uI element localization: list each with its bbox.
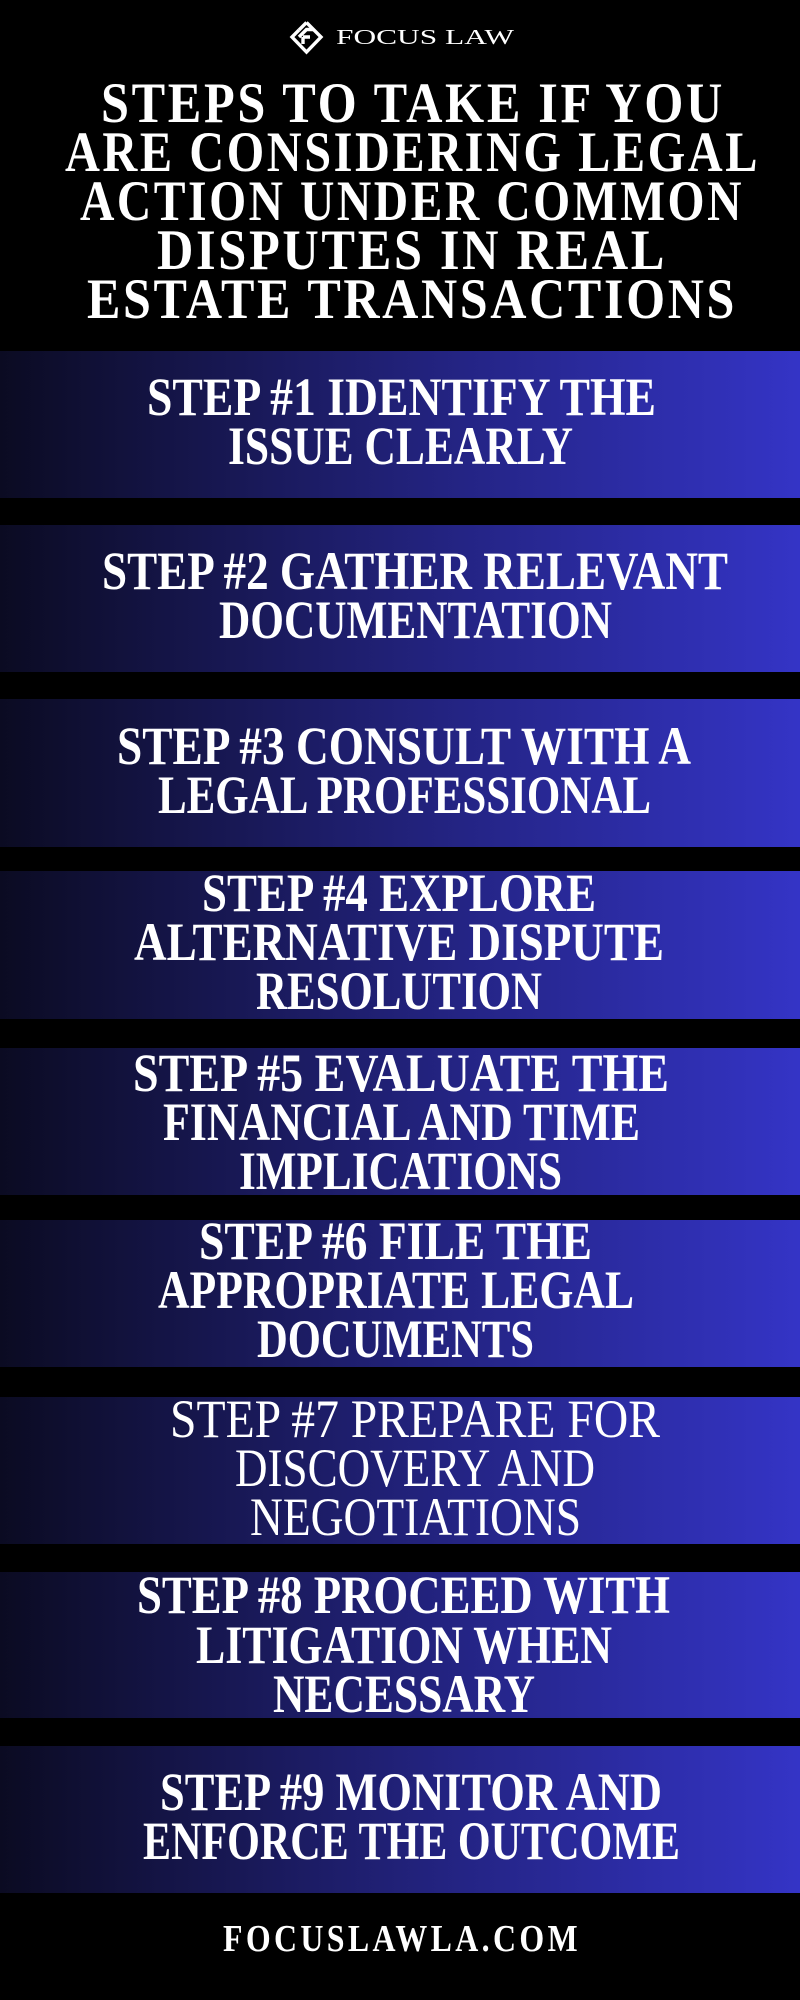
panel: step 5: FINANCIAL AND TIME: [163, 1092, 640, 1152]
panel: step 3: [0, 699, 800, 847]
panel: step 7: DISCOVERY AND: [235, 1438, 595, 1498]
panel: step 6: STEP #6 FILE THE: [199, 1211, 592, 1271]
panel: step 6: APPROPRIATE LEGAL: [158, 1260, 634, 1320]
panel: step 5: STEP #5 EVALUATE THE: [133, 1043, 669, 1103]
panel: step 1: STEP #1 IDENTIFY THE: [147, 367, 656, 427]
panel: step 5: IMPLICATIONS: [239, 1141, 562, 1201]
panel: step 3: LEGAL PROFESSIONAL: [158, 765, 651, 825]
title: [65, 72, 760, 331]
title: STEPS TO TAKE IF YOU: [101, 72, 725, 135]
footer: website: FOCUSLAWLA.COM: [223, 1918, 581, 1960]
panel: step 3: STEP #3 CONSULT WITH A: [117, 716, 691, 776]
panel: step 2: [0, 525, 800, 672]
panel: step 2: DOCUMENTATION: [219, 590, 612, 650]
panel: step 5: [0, 1043, 800, 1201]
panel: step 8: [0, 1565, 800, 1724]
panel: step 1: ISSUE CLEARLY: [228, 416, 573, 476]
logo: Focus Law: [292, 22, 514, 52]
panel: step 1: [0, 351, 800, 498]
panel: step 4: [0, 863, 800, 1021]
panel: step 4: RESOLUTION: [256, 961, 542, 1021]
panel: step 7: STEP #7 PREPARE FOR: [170, 1389, 660, 1449]
panel: step 9: STEP #9 MONITOR AND: [160, 1762, 662, 1822]
brand name: FOCUS LAW: [336, 25, 514, 49]
panel: step 8: STEP #8 PROCEED WITH: [137, 1565, 670, 1625]
panel: step 7: NEGOTIATIONS: [250, 1487, 581, 1547]
panel: step 4: ALTERNATIVE DISPUTE: [134, 912, 664, 972]
panel: step 6: [0, 1211, 800, 1369]
icon: diamond logo mark: [292, 22, 321, 52]
panel: step 7: [0, 1389, 800, 1547]
title: DISPUTES IN REAL: [157, 219, 667, 282]
panel: step 4: STEP #4 EXPLORE: [202, 863, 596, 923]
panel: step 6: DOCUMENTS: [257, 1309, 534, 1369]
panel: step 8: NECESSARY: [273, 1664, 535, 1724]
panel: step 8: LITIGATION WHEN: [196, 1615, 612, 1675]
panel: step 9: [0, 1746, 800, 1893]
